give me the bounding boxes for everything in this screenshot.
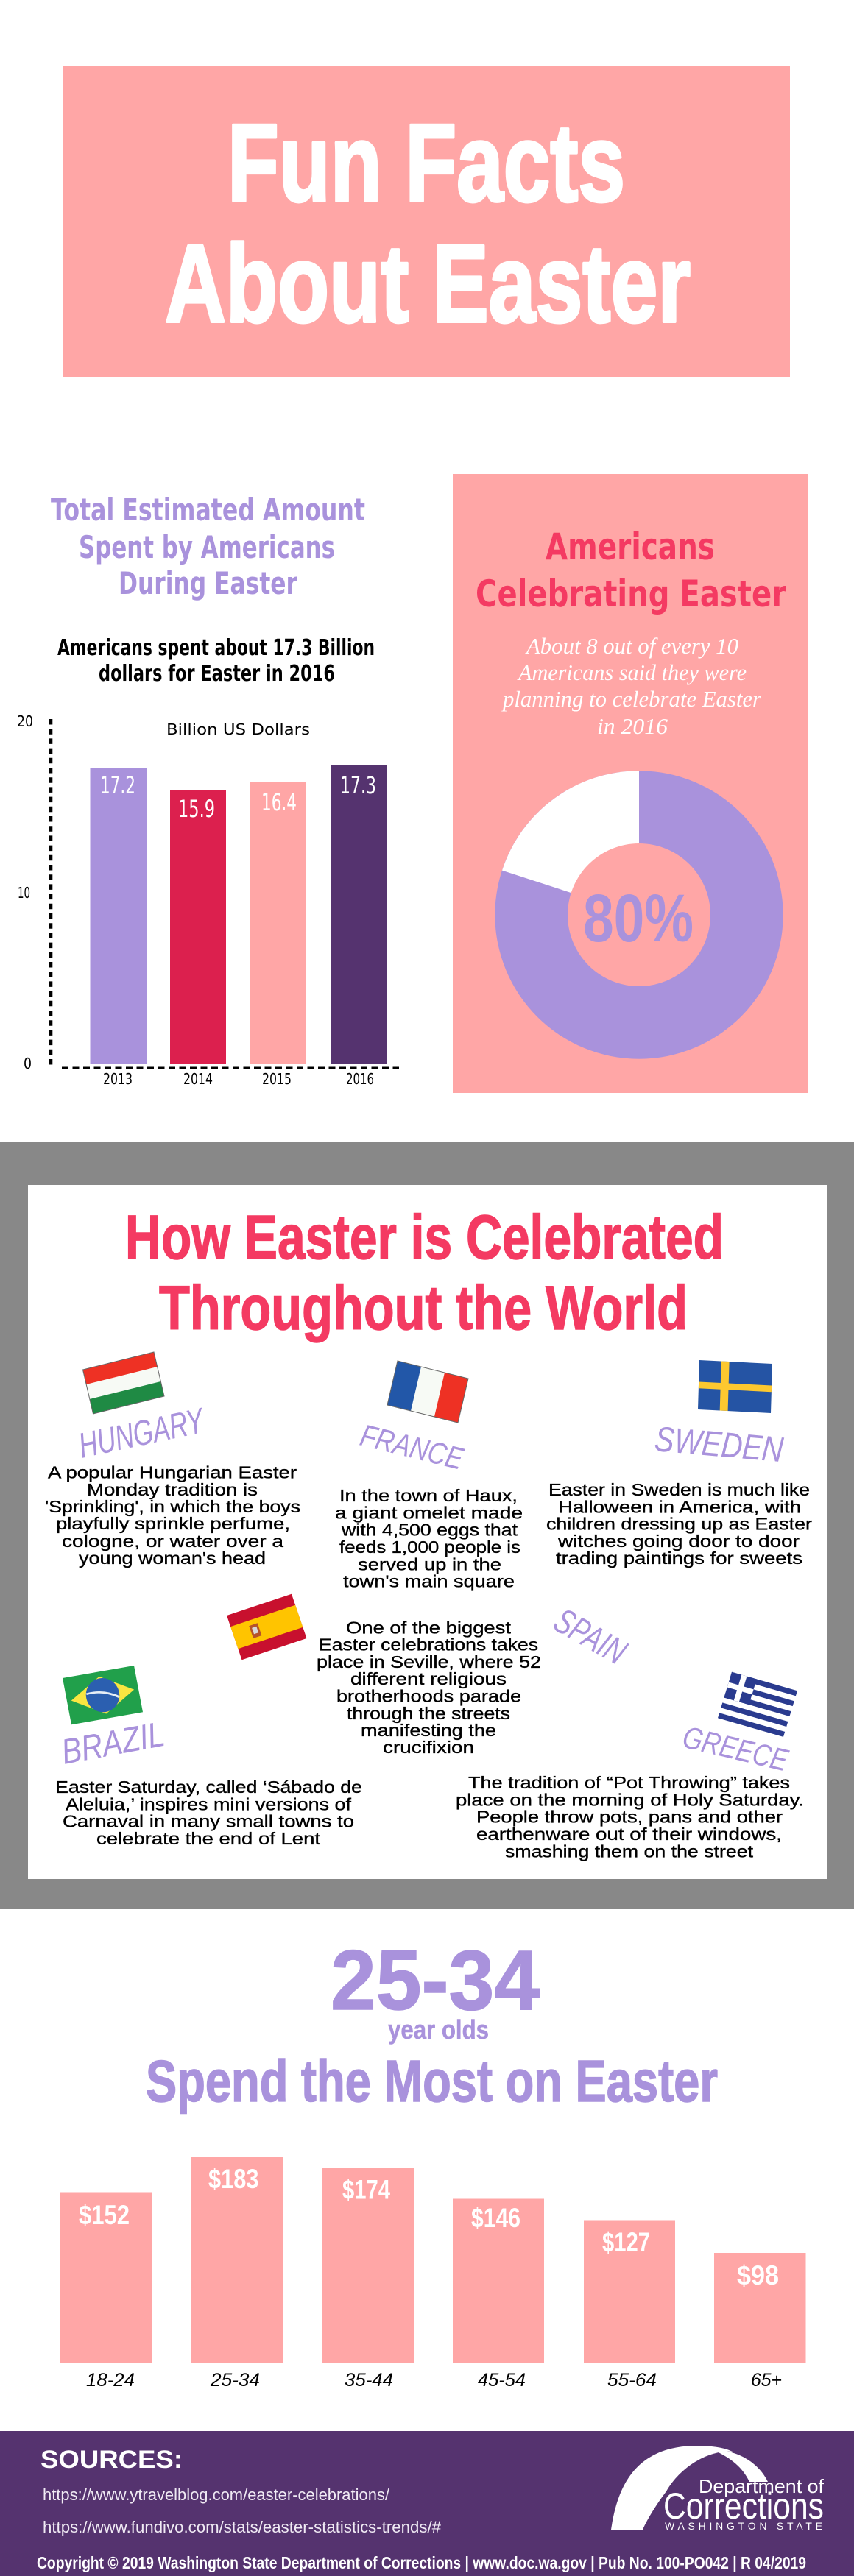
text: 8 out of 10: About 8 out of every 10 [525, 633, 738, 659]
sources: https://www.ytravelblog.com/easter-celebrations/ [43, 2485, 390, 2504]
text: brazil [55, 1777, 362, 1848]
text: france [335, 1486, 523, 1591]
label: hungary: HUNGARY [75, 1401, 209, 1466]
text: 8 out of 10 [501, 633, 762, 739]
logo: department of corrections: Corrections [663, 2485, 824, 2527]
bar chart: billion US dollars: Billion US Dollars [166, 721, 310, 738]
bar chart: billion US dollars: 2013 [103, 1070, 133, 1088]
icon: hungary flag [82, 1352, 164, 1414]
bar chart: billion US dollars: 2016 [346, 1070, 374, 1088]
bar chart: spending by age: 65+ [751, 2370, 782, 2391]
text: greece: place on the morning of Holy Saturday. [456, 1790, 804, 1809]
sources: SOURCES: [40, 2446, 183, 2474]
heading: 25-34 year olds: 25-34 [331, 1933, 540, 2028]
heading: 25-34 year olds: year olds [388, 2014, 489, 2045]
panel: total spending [17, 492, 399, 1088]
text: hungary [45, 1463, 300, 1568]
sources: https://www.fundivo.com/stats/easter-statistics-trends/# [43, 2518, 442, 2536]
text: hungary: playfully sprinkle perfume, [56, 1514, 290, 1533]
text: greece [456, 1773, 804, 1861]
icon: brazil flag [63, 1666, 143, 1724]
text: hungary: young woman's head [79, 1549, 266, 1568]
footer [0, 2431, 854, 2576]
bar chart: spending by age: 18-24 [86, 2370, 135, 2391]
bar chart: spending by age: $152 [79, 2200, 130, 2230]
text: spain: through the streets [347, 1704, 510, 1723]
heading: total estimated amount [51, 492, 365, 601]
panel: spending by age [60, 1933, 805, 2391]
label: greece: GREECE [680, 1719, 792, 1778]
bar chart: billion US dollars: 20 [17, 712, 33, 730]
title banner [63, 66, 790, 377]
heading: americans celebrating: Celebrating Easter [476, 573, 786, 615]
subheading: 17.3 billion: dollars for Easter in 2016 [99, 661, 335, 687]
text: france: a giant omelet made [335, 1503, 523, 1522]
text: france: In the town of Haux, [339, 1486, 518, 1505]
heading: total estimated amount: Total Estimated Amount [51, 492, 365, 528]
label: brazil: BRAZIL [58, 1715, 168, 1772]
donut chart: 80% [495, 771, 783, 1059]
bar chart: billion US dollars: 0 [24, 1055, 32, 1072]
text: spain [317, 1618, 541, 1757]
heading: throughout the world: Throughout the World [159, 1273, 688, 1342]
subheading: 17.3 billion: Americans spent about 17.3 Billion [57, 635, 375, 661]
heading: americans celebrating [476, 526, 786, 615]
text: brazil: Easter Saturday, called ‘Sábado de [55, 1777, 362, 1797]
text: france: feeds 1,000 people is [339, 1538, 520, 1557]
text: 8 out of 10: in 2016 [597, 713, 668, 739]
text: hungary: 'Sprinkling', in which the boys [45, 1497, 300, 1516]
heading: americans celebrating: Americans [546, 526, 715, 568]
text: spain: Easter celebrations takes [319, 1635, 538, 1655]
heading: throughout the world [125, 1203, 724, 1342]
bar chart: spending by age: $174 [342, 2174, 390, 2205]
text: france: town's main square [343, 1572, 515, 1591]
label: spain: SPAIN [548, 1601, 633, 1672]
bar chart: billion US dollars: 15.9 [178, 795, 215, 823]
bar chart: spending by age: $127 [602, 2227, 650, 2257]
text: greece: earthenware out of their windows, [476, 1825, 782, 1844]
text: spain: different religious [350, 1669, 507, 1688]
icon: france flag [387, 1361, 468, 1423]
text: greece: People throw pots, pans and other [476, 1808, 783, 1827]
text: sweden: trading paintings for sweets [556, 1549, 802, 1568]
bar chart: spending by age: 55-64 [607, 2370, 657, 2391]
heading: 25-34 year olds [146, 1933, 718, 2114]
title text [165, 101, 691, 345]
bar chart: billion US dollars [17, 712, 399, 1088]
text: sweden: children dressing up as Easter [546, 1515, 812, 1534]
sources [40, 2446, 442, 2536]
text: 8 out of 10: Americans said they were [517, 659, 747, 685]
bar chart: billion US dollars: 17.3 [340, 771, 376, 799]
text: france: served up in the [358, 1554, 501, 1574]
heading: 25-34 year olds: Spend the Most on Easter [146, 2048, 718, 2114]
text: spain: crucifixion [383, 1738, 474, 1757]
heading: throughout the world: How Easter is Celebrated [125, 1203, 724, 1272]
bar chart: spending by age: 25-34 [210, 2370, 260, 2391]
text: greece: The tradition of “Pot Throwing” takes [468, 1773, 790, 1792]
bar chart: spending by age: $98 [737, 2260, 779, 2290]
icon: spain flag [227, 1594, 306, 1660]
donut chart: 80%: 80% [583, 881, 694, 956]
label: france: FRANCE [357, 1418, 467, 1476]
subheading: 17.3 billion [57, 635, 375, 687]
text: spain: manifesting the [361, 1721, 496, 1740]
icon: greece flag [718, 1672, 797, 1737]
bar chart: billion US dollars: 2014 [183, 1070, 213, 1088]
logo: department of corrections [611, 2446, 825, 2532]
label: sweden: SWEDEN [653, 1420, 785, 1470]
text: spain: One of the biggest [346, 1618, 512, 1637]
bar chart: spending by age [60, 2157, 805, 2391]
bar chart: spending by age: $146 [471, 2203, 520, 2233]
title text: About Easter [165, 222, 691, 345]
logo: department of corrections: WASHINGTON STATE [665, 2520, 822, 2532]
bar chart: billion US dollars: 10 [18, 884, 30, 902]
bar chart: billion US dollars: 17.2 [100, 771, 135, 799]
text: brazil: Carnaval in many small towns to [63, 1812, 354, 1831]
bar chart: spending by age: 35-44 [345, 2370, 393, 2391]
text: spain: brotherhoods parade [336, 1687, 521, 1706]
text: sweden: Easter in Sweden is much like [548, 1480, 810, 1499]
bar chart: spending by age: $183 [208, 2164, 259, 2194]
text: sweden [546, 1480, 812, 1568]
bar chart: billion US dollars: 16.4 [261, 788, 297, 816]
text: hungary: cologne, or water over a [62, 1532, 283, 1551]
text: 8 out of 10: planning to celebrate Easter [501, 686, 762, 712]
text: sweden: witches going door to door [557, 1532, 800, 1551]
bar chart: spending by age: 45-54 [478, 2370, 526, 2391]
panel: how easter is celebrated around the world [0, 1142, 854, 1909]
title text: Fun Facts [227, 101, 625, 224]
heading: total estimated amount: During Easter [119, 565, 297, 601]
text: hungary: Monday tradition is [87, 1480, 258, 1499]
text: spain: place in Seville, where 52 [317, 1652, 541, 1671]
icon: sweden flag [698, 1360, 772, 1413]
panel: americans celebrating easter [453, 474, 808, 1093]
text: hungary: A popular Hungarian Easter [48, 1463, 297, 1482]
logo: department of corrections: Department of [699, 2475, 825, 2497]
heading: total estimated amount: Spent by Americans [79, 529, 335, 565]
text: brazil: Aleluia,’ inspires mini versions of [66, 1794, 352, 1814]
text: greece: smashing them on the street [505, 1841, 754, 1861]
bar chart: billion US dollars: 2015 [262, 1070, 292, 1088]
text: sweden: Halloween in America, with [558, 1497, 801, 1516]
text: france: with 4,500 eggs that [341, 1521, 518, 1540]
text: brazil: celebrate the end of Lent [96, 1829, 321, 1848]
